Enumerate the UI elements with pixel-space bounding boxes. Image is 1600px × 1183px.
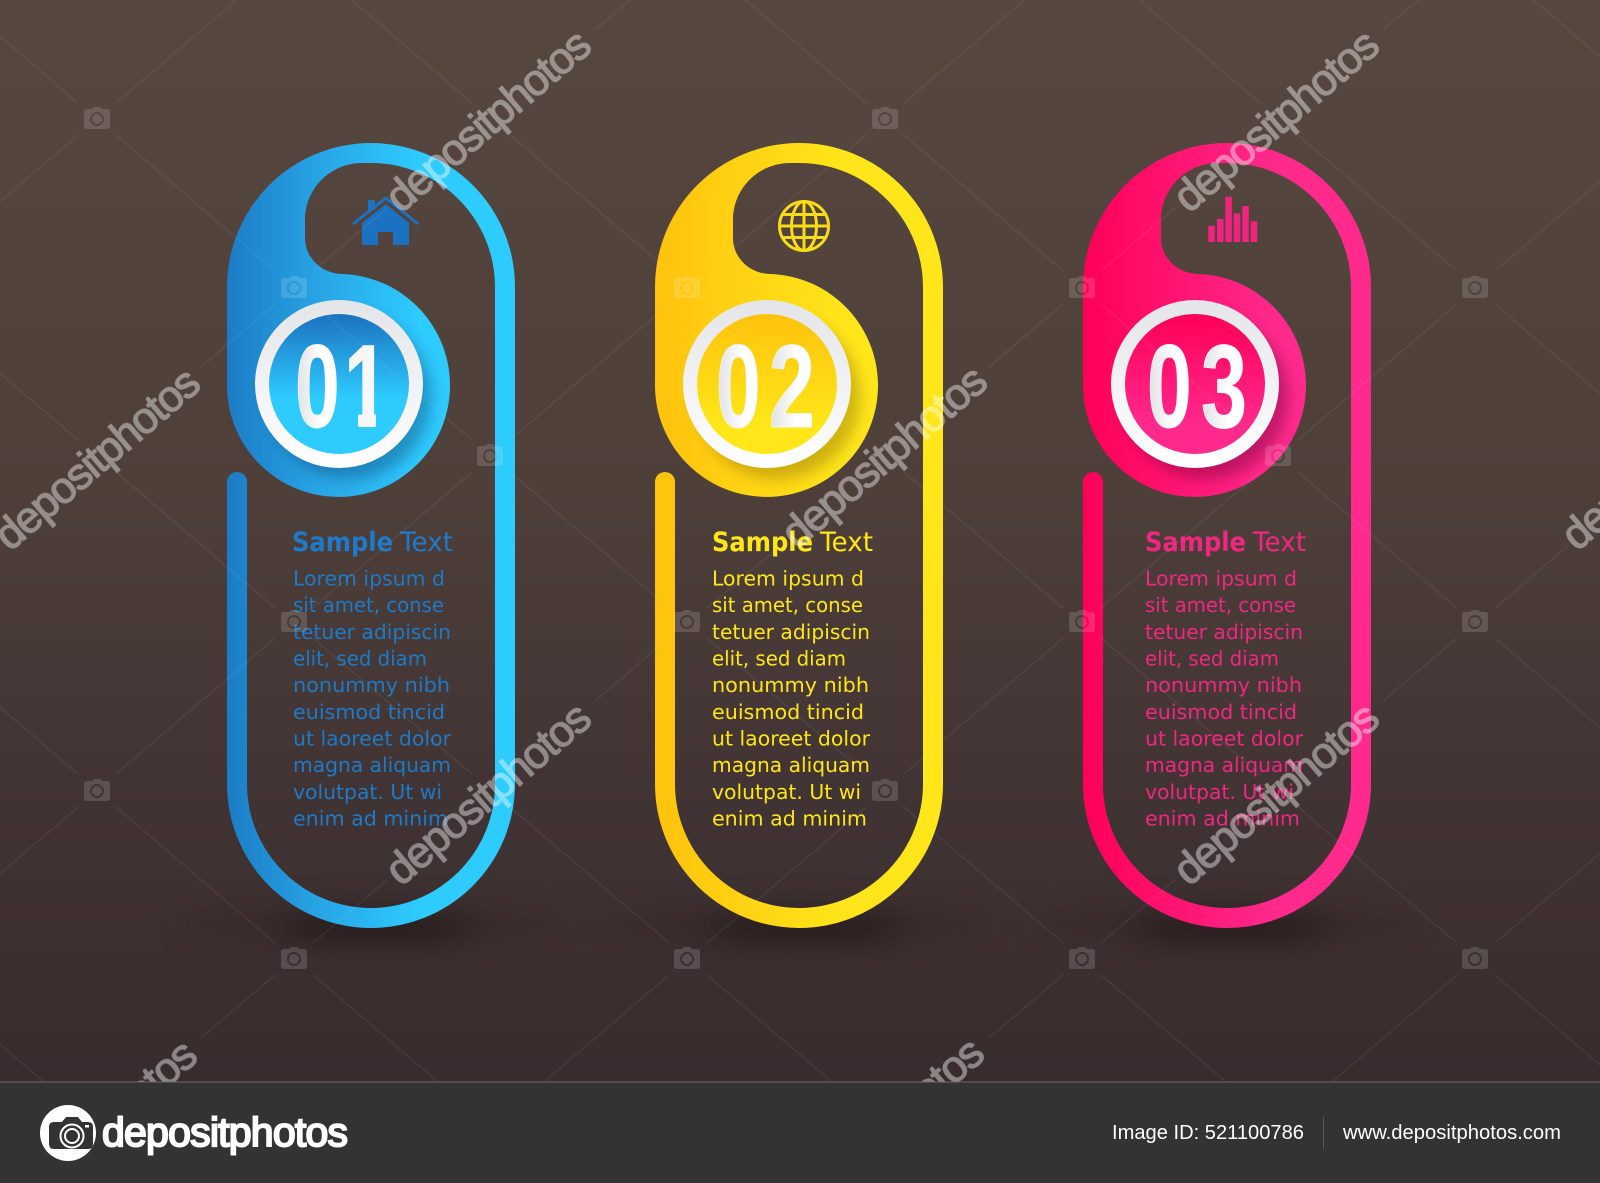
text block: step 01: Lorem ipsum d <box>293 566 445 590</box>
number 01 <box>298 344 376 428</box>
text block: step 01: euismod tincid <box>293 700 445 724</box>
number 01: 1 <box>344 322 389 453</box>
text block: step 01: tetuer adipiscin <box>293 620 451 644</box>
text block: step 03: enim ad minim <box>1145 806 1300 830</box>
text block: step 03: tetuer adipiscin <box>1145 620 1303 644</box>
number 02: 2 <box>769 320 815 452</box>
panel: step 02 <box>655 143 933 918</box>
watermark text: depositphotos <box>376 19 601 222</box>
text block: step 01: Sample <box>292 527 393 558</box>
icon: house <box>353 198 418 245</box>
text block: step 01: magna aliquam <box>293 753 451 777</box>
panel: step 01 <box>227 143 505 918</box>
number 03 <box>1147 320 1247 453</box>
number 03: 0 <box>1147 322 1192 453</box>
watermark text: depositphotos <box>376 692 601 895</box>
text block: step 02: euismod tincid <box>712 700 864 724</box>
text block: step 02: enim ad minim <box>712 806 867 830</box>
footer logo <box>40 1105 348 1161</box>
text block: step 03: sit amet, conse <box>1145 593 1296 617</box>
text block: step 02: Text <box>819 527 873 558</box>
icon: bar chart <box>1208 197 1257 242</box>
text block: step 03: Text <box>1252 527 1306 558</box>
text block: step 02: nonummy nibh <box>712 673 869 697</box>
text block: step 03 <box>1145 527 1306 830</box>
image id: Image ID: 521100786 <box>1112 1122 1304 1144</box>
text block: step 02: sit amet, conse <box>712 593 863 617</box>
text block: step 02: magna aliquam <box>712 753 870 777</box>
text block: step 01 <box>292 527 453 830</box>
text block: step 02 <box>712 527 873 830</box>
text block: step 01: Text <box>399 527 453 558</box>
text block: step 03: nonummy nibh <box>1145 673 1302 697</box>
icon: globe <box>780 202 828 250</box>
text block: step 03: euismod tincid <box>1145 700 1297 724</box>
text block: step 03: Lorem ipsum d <box>1145 566 1297 590</box>
text block: step 02: tetuer adipiscin <box>712 620 870 644</box>
panel: step 03 <box>1083 143 1361 918</box>
text block: step 03: volutpat. Ut wi <box>1145 780 1294 804</box>
number 02: 0 <box>716 322 761 453</box>
website url: www.depositphotos.com <box>1342 1122 1561 1144</box>
watermark text: depositphotos <box>772 355 997 558</box>
footer bar <box>0 1082 1600 1183</box>
text block: step 02: Sample <box>712 527 813 558</box>
number 01: 0 <box>295 322 340 453</box>
text block: step 02: Lorem ipsum d <box>712 566 864 590</box>
text block: step 03: ut laoreet dolor <box>1145 726 1304 750</box>
shadow under pills <box>181 905 1417 945</box>
text block: step 02: elit, sed diam <box>712 646 846 670</box>
watermark camera icons <box>84 107 1488 969</box>
text block: step 03: elit, sed diam <box>1145 646 1279 670</box>
text block: step 02: volutpat. Ut wi <box>712 780 861 804</box>
watermark text: depositphotos <box>1164 692 1389 895</box>
text block: step 03: Sample <box>1145 527 1246 558</box>
watermark text: depositphotos <box>1164 19 1389 222</box>
text block: step 02: ut laoreet dolor <box>712 726 871 750</box>
number 03: 3 <box>1201 320 1247 452</box>
footer logo: depositphotos <box>102 1109 348 1155</box>
text block: step 01: nonummy nibh <box>293 673 450 697</box>
text block: step 01: elit, sed diam <box>293 646 427 670</box>
text block: step 01: volutpat. Ut wi <box>293 780 442 804</box>
text block: step 01: enim ad minim <box>293 806 448 830</box>
text block: step 01: ut laoreet dolor <box>293 726 452 750</box>
text block: step 03: magna aliquam <box>1145 753 1303 777</box>
text block: step 01: sit amet, conse <box>293 593 444 617</box>
number 02 <box>716 320 815 453</box>
